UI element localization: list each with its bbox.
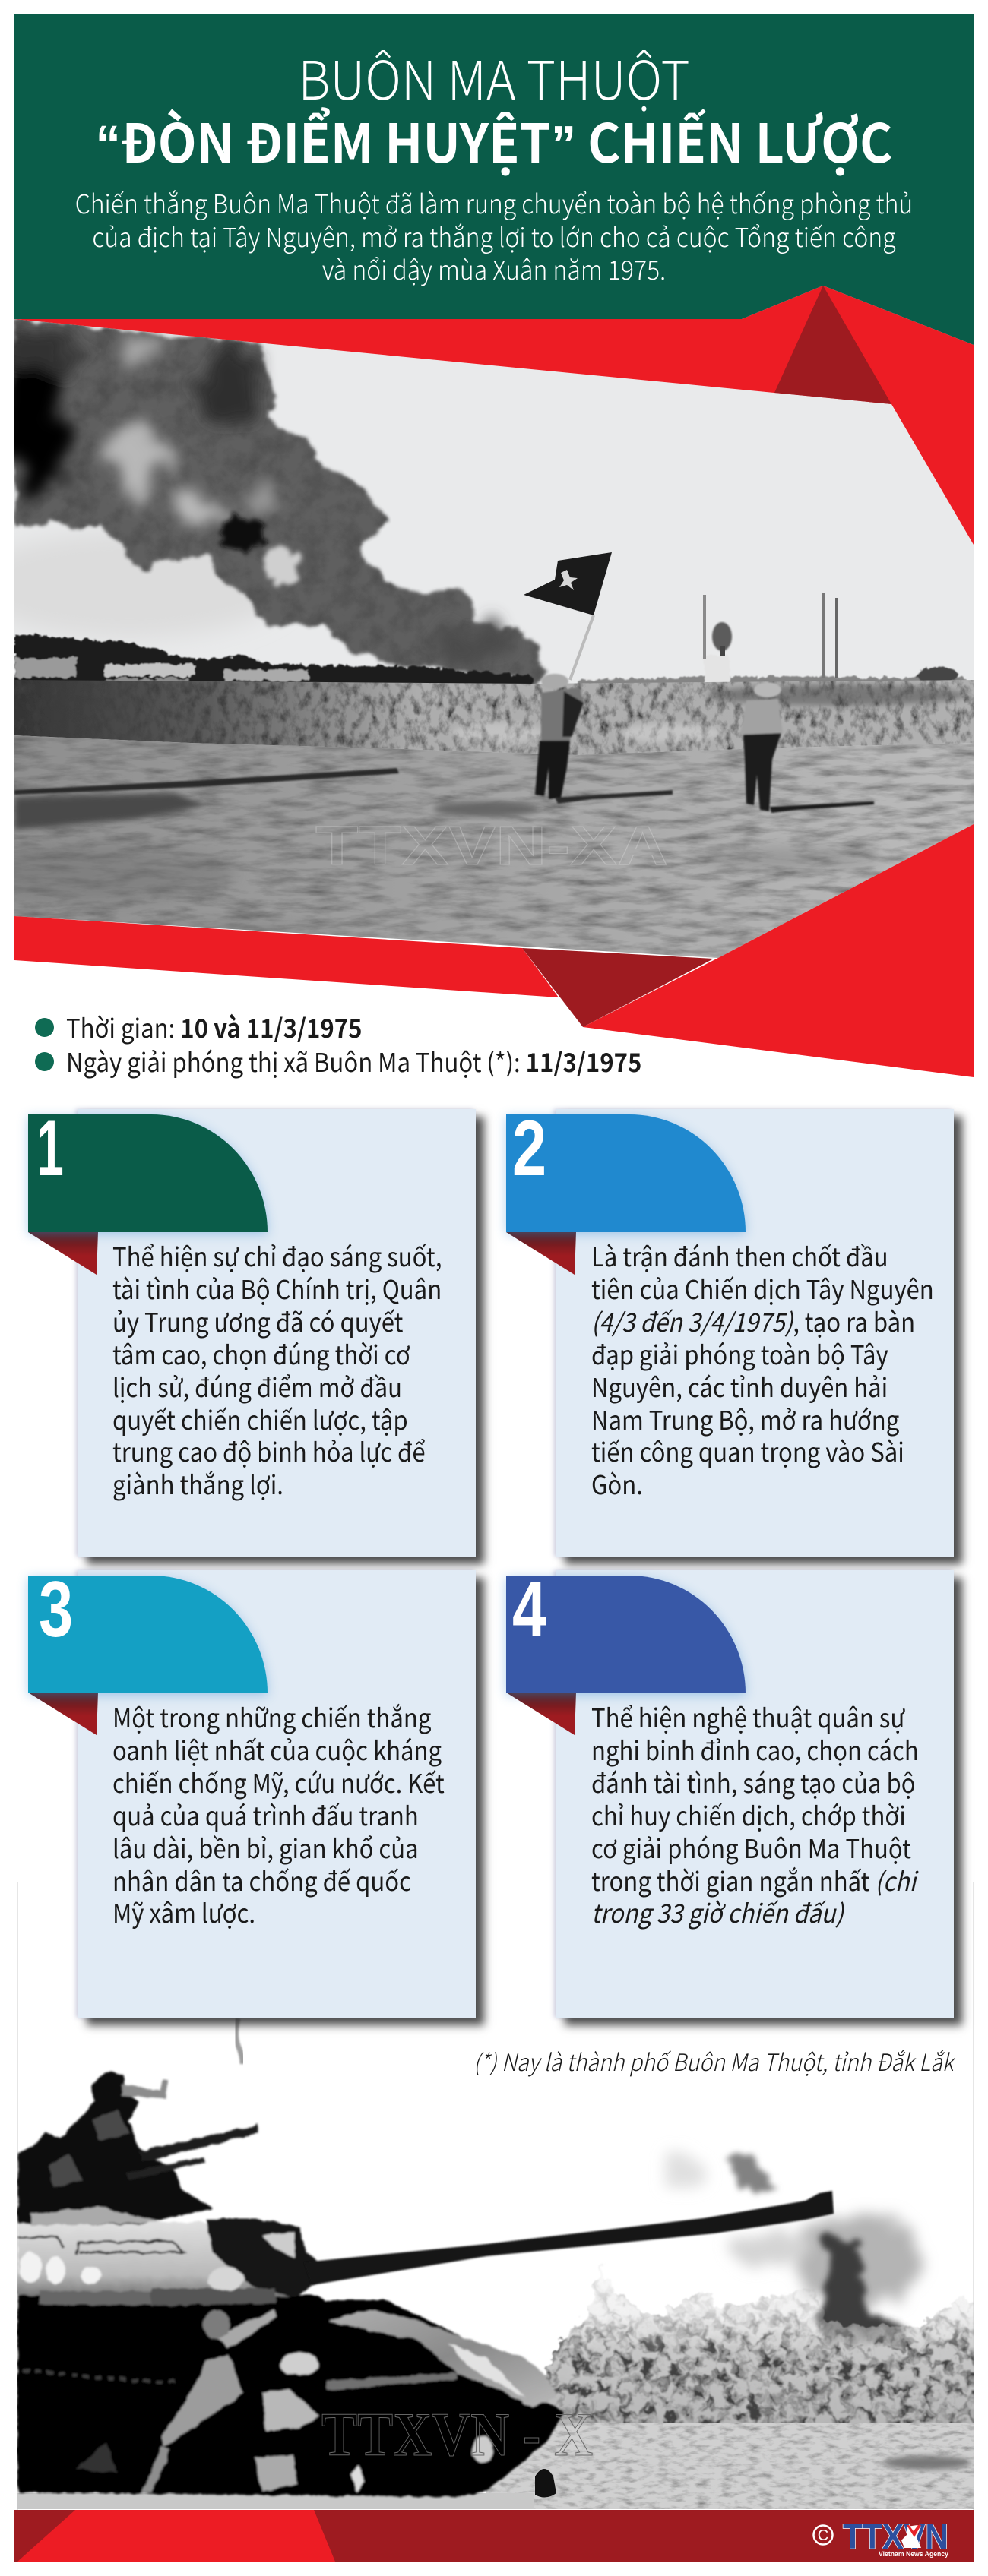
fold <box>506 1693 578 1737</box>
red lower shapes <box>14 824 974 1077</box>
title line 1: BUÔN MA THUỘT <box>298 39 690 115</box>
tank hull <box>17 2296 564 2497</box>
card text: nhân dân ta chống đế quốc <box>112 1861 411 1898</box>
card text: oanh liệt nhất của cuộc kháng <box>112 1731 442 1768</box>
card text: giành thắng lợi. <box>112 1465 283 1502</box>
megaphone <box>122 2080 167 2099</box>
card 3 <box>28 1570 475 2018</box>
second soldier <box>740 682 874 813</box>
card text: Thể hiện sự chỉ đạo sáng suốt, <box>112 1237 442 1274</box>
smoke columns <box>726 2153 905 2383</box>
card text: cơ giải phóng Buôn Ma Thuột <box>591 1828 911 1866</box>
card text: nghi binh đỉnh cao, chọn cách <box>591 1731 919 1768</box>
card text: Mỹ xâm lược. <box>112 1893 255 1930</box>
header background shapes <box>14 14 974 545</box>
road <box>17 2493 534 2509</box>
tank body <box>17 2072 564 2497</box>
intro text: của địch tại Tây Nguyên, mở ra thắng lợi to lớn cho cả cuộc Tổng tiến công <box>92 216 896 254</box>
machine guns <box>138 2125 258 2162</box>
card text: lịch sử, đúng điểm mở đầu <box>112 1367 402 1405</box>
title line 2: “ĐÒN ĐIỂM HUYỆT” CHIẾN LƯỢC <box>96 102 892 179</box>
main gun <box>304 2191 834 2285</box>
number tab: 1 <box>36 1105 64 1193</box>
card text: Một trong những chiến thắng <box>112 1698 431 1735</box>
card text: quả của quá trình đấu tranh <box>112 1796 419 1833</box>
number tab: 3 <box>39 1566 73 1654</box>
card 4 <box>506 1570 954 2018</box>
photo: burning smoke and soldiers with flag <box>0 319 974 972</box>
number tab <box>506 1576 746 1693</box>
turret light <box>17 2222 319 2298</box>
crew on turret <box>17 2072 213 2224</box>
number tab: 4 <box>512 1566 546 1654</box>
kneeling soldier <box>255 2353 493 2492</box>
card text: quyết chiến chiến lược, tập <box>112 1400 408 1437</box>
logo: TTXVN: Vietnam News Agency <box>879 2550 948 2558</box>
number tab: 2 <box>512 1105 546 1193</box>
card text: Gòn. <box>591 1465 643 1502</box>
fold <box>506 1232 578 1276</box>
card text: Thể hiện nghệ thuật quân sự <box>591 1698 904 1735</box>
mantlet <box>207 2219 318 2297</box>
card text: tài tình của Bộ Chính trị, Quân <box>112 1269 442 1307</box>
card 2 <box>506 1109 954 1557</box>
card text <box>112 1240 442 1500</box>
intro text <box>75 183 913 287</box>
card text: chỉ huy chiến dịch, chớp thời <box>591 1796 906 1833</box>
logo: TTXVN: TTXVN <box>843 2517 948 2556</box>
card text: tiến công quan trọng vào Sài <box>591 1432 904 1469</box>
card text: Nguyên, các tỉnh duyên hải <box>591 1367 888 1405</box>
intro text: và nổi dậy mùa Xuân năm 1975. <box>322 249 666 287</box>
footer bar <box>0 2507 988 2576</box>
grass <box>486 2423 974 2509</box>
card text: lâu dài, bền bỉ, gian khổ của <box>112 1828 419 1866</box>
card text <box>591 1701 919 1929</box>
footnote: (*) Nay là thành phố Buôn Ma Thuột, tỉnh Đắk Lắk <box>473 2043 954 2078</box>
photo: tank with soldiers <box>17 1882 988 2510</box>
card 1 <box>21 1105 491 1571</box>
fold <box>28 1693 100 1737</box>
card text: đánh tài tình, sáng tạo của bộ <box>591 1763 916 1800</box>
bullet 1: Thời gian: 10 và 11/3/1975 <box>66 1008 363 1045</box>
smoke haze <box>661 2156 923 2307</box>
bushes <box>544 2264 974 2423</box>
card text <box>591 1240 934 1500</box>
card text: Là trận đánh then chốt đầu <box>591 1237 888 1274</box>
bullet 2: Ngày giải phóng thị xã Buôn Ma Thuột (*): 11/3/1975 <box>66 1042 641 1079</box>
vegetation band <box>14 680 974 755</box>
intro text: Chiến thắng Buôn Ma Thuột đã làm rung chuyển toàn bộ hệ thống phòng thủ <box>75 183 913 221</box>
card text: chiến chống Mỹ, cứu nước. Kết <box>112 1763 445 1800</box>
number tab <box>506 1114 746 1232</box>
card text <box>112 1701 445 1929</box>
flag bearer soldier <box>524 552 673 804</box>
card text: (4/3 đến 3/4/1975), tạo ra bàn <box>591 1302 915 1339</box>
card text: tiên của Chiến dịch Tây Nguyên <box>591 1269 934 1307</box>
card text: trong 33 giờ chiến đấu) <box>591 1893 844 1930</box>
ground <box>14 735 974 972</box>
standing soldier <box>141 2268 277 2495</box>
watermark: TTXVN-XA <box>315 816 668 877</box>
header panel <box>14 14 974 545</box>
number tab <box>28 1576 268 1693</box>
card text: trong thời gian ngắn nhất (chi <box>591 1861 916 1898</box>
card text: trung cao độ binh hỏa lực để <box>112 1432 426 1469</box>
watermark: TTXVN - X <box>321 2400 593 2469</box>
card text: đạp giải phóng toàn bộ Tây <box>591 1335 888 1372</box>
distant tree line and buildings <box>14 632 967 684</box>
fold <box>28 1232 100 1276</box>
card text: ủy Trung ương đã có quyết <box>112 1302 403 1339</box>
logo: TTXVN: C <box>818 2527 828 2544</box>
card text: tâm cao, chọn đúng thời cơ <box>112 1335 410 1372</box>
card text: Nam Trung Bộ, mở ra hướng <box>591 1400 899 1437</box>
number tab <box>28 1114 268 1232</box>
